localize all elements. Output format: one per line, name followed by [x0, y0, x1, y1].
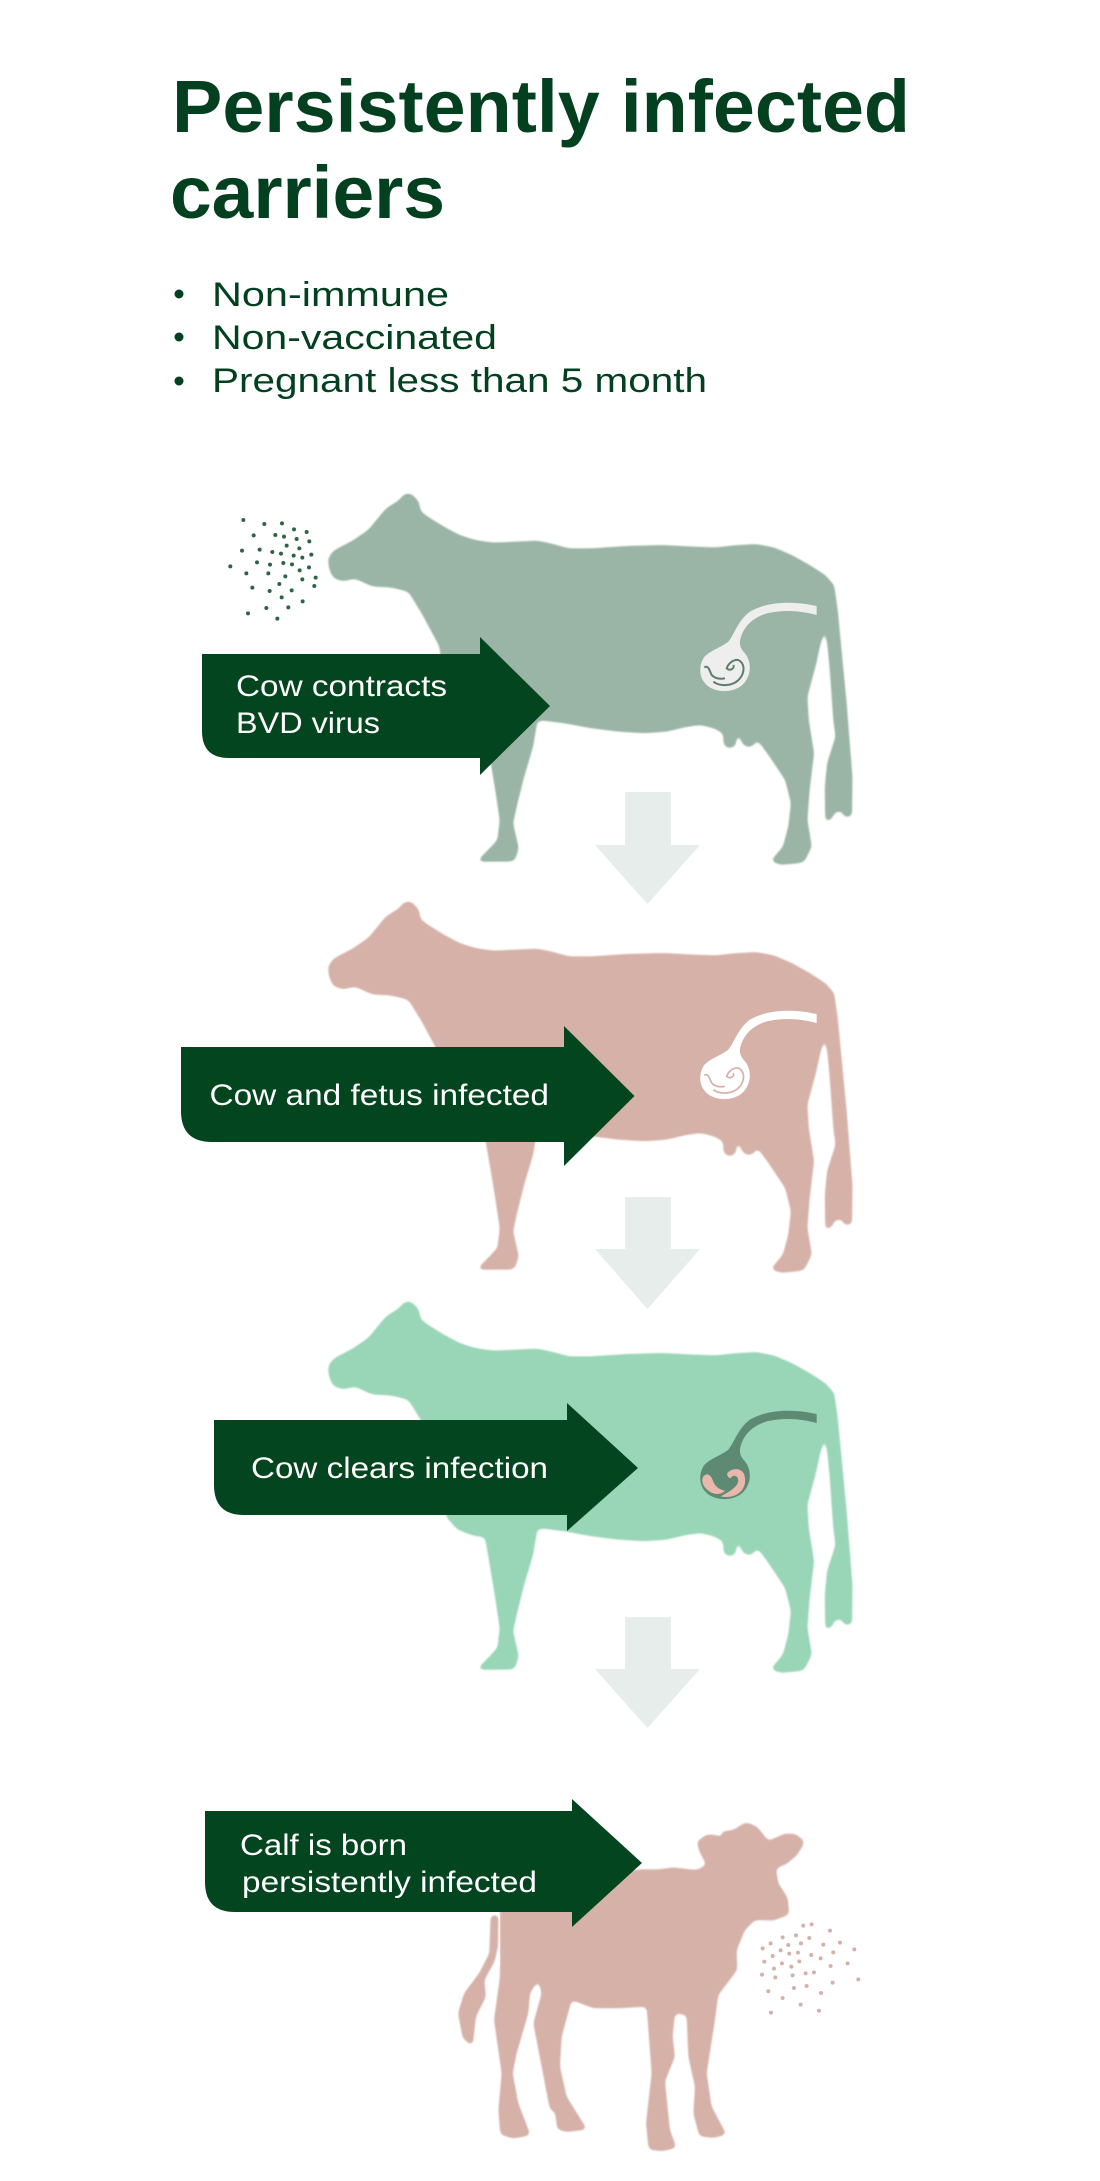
down arrow 2 [595, 1197, 700, 1309]
arrow label: calf is born persistently infected [205, 1799, 642, 1927]
cow 1: grey-green pregnant cow [328, 493, 852, 865]
arrow label: cow contracts BVD virus: BVD virus [236, 707, 380, 740]
arrow label: cow contracts BVD virus: Cow contracts [236, 670, 447, 703]
bullet list: risk conditions: Non-immune [212, 276, 449, 314]
cow 2: pink infected cow [328, 901, 852, 1273]
arrow label: cow clears infection: Cow clears infection [251, 1452, 548, 1485]
arrow label: calf is born persistently infected: persistently infected [242, 1866, 537, 1899]
arrow label: cow and fetus infected [181, 1026, 634, 1166]
icon: uterus and fetus, cow 2 [700, 1011, 817, 1099]
bullet list: risk conditions: Non-vaccinated [212, 319, 497, 357]
arrow label: cow contracts BVD virus [202, 637, 550, 775]
icon: uterus and fetus, cow 1 [700, 603, 817, 691]
icon: uterus and fetus, cow 3 [700, 1411, 817, 1499]
cow 3: green recovered cow [328, 1301, 852, 1673]
title: Persistently infected [172, 65, 910, 148]
title [170, 65, 910, 234]
bullet list: risk conditions [174, 276, 707, 400]
icon: virus particles near calf [760, 1922, 860, 2015]
down arrow 1 [595, 792, 700, 904]
down arrow 3 [595, 1617, 700, 1728]
bullet list: risk conditions: Pregnant less than 5 month [212, 362, 707, 400]
title: carriers [170, 151, 445, 234]
arrow label: cow clears infection [214, 1403, 638, 1531]
icon: virus particles near cow nose [228, 518, 318, 621]
arrow label: calf is born persistently infected: Calf is born [240, 1829, 407, 1862]
calf: persistently infected [458, 1822, 805, 2151]
arrow label: cow and fetus infected: Cow and fetus infected [210, 1079, 549, 1112]
